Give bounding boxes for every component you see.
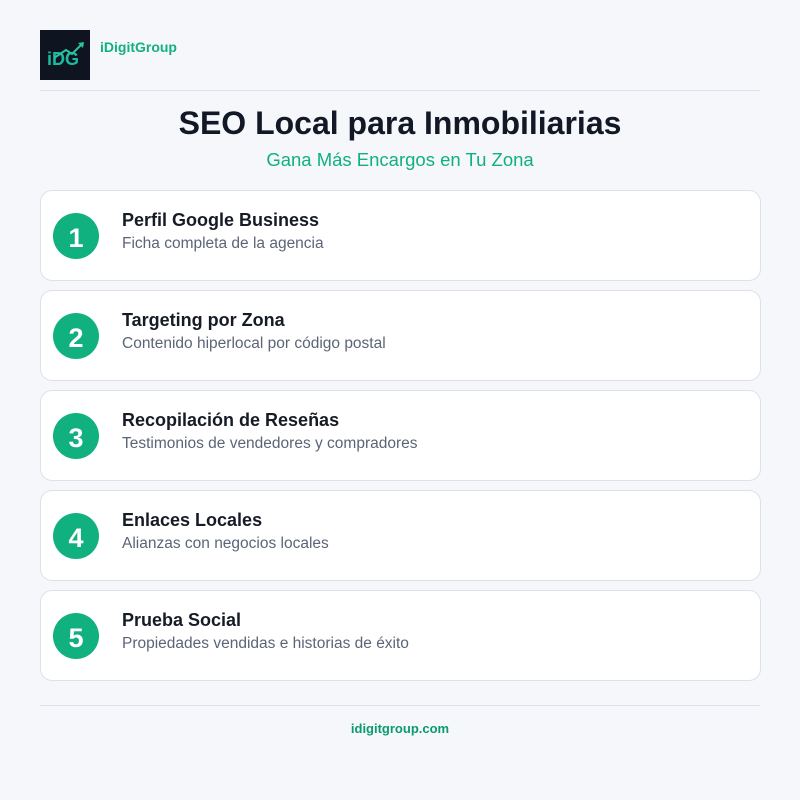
card 1 <box>40 190 761 281</box>
title: SEO Local para Inmobiliarias <box>179 105 621 141</box>
card 2: Contenido hiperlocal por código postal <box>122 335 386 352</box>
card 3: 3 <box>68 423 84 453</box>
card 3: Testimonios de vendedores y compradores <box>122 435 418 452</box>
brand name: iDigitGroup <box>100 39 177 55</box>
subtitle: Gana Más Encargos en Tu Zona <box>266 149 534 170</box>
card 5: Prueba Social <box>122 610 241 630</box>
card 2: Targeting por Zona <box>122 310 285 330</box>
footer: idigitgroup.com <box>351 721 449 736</box>
card 4: 4 <box>68 523 84 553</box>
card 1: 1 <box>68 223 84 253</box>
card 1: Ficha completa de la agencia <box>122 235 324 252</box>
card 4: Enlaces Locales <box>122 510 262 530</box>
logo <box>40 30 90 80</box>
card 5: Propiedades vendidas e historias de éxito <box>122 635 409 652</box>
card 3: Recopilación de Reseñas <box>122 410 339 430</box>
card 4: Alianzas con negocios locales <box>122 535 329 552</box>
logo: iDG <box>47 49 79 69</box>
card 3 <box>40 390 761 481</box>
card 5 <box>40 590 761 681</box>
card 4 <box>40 490 761 581</box>
card 2: 2 <box>68 323 84 353</box>
card 1: Perfil Google Business <box>122 210 319 230</box>
card 5: 5 <box>68 623 84 653</box>
card 2 <box>40 290 761 381</box>
